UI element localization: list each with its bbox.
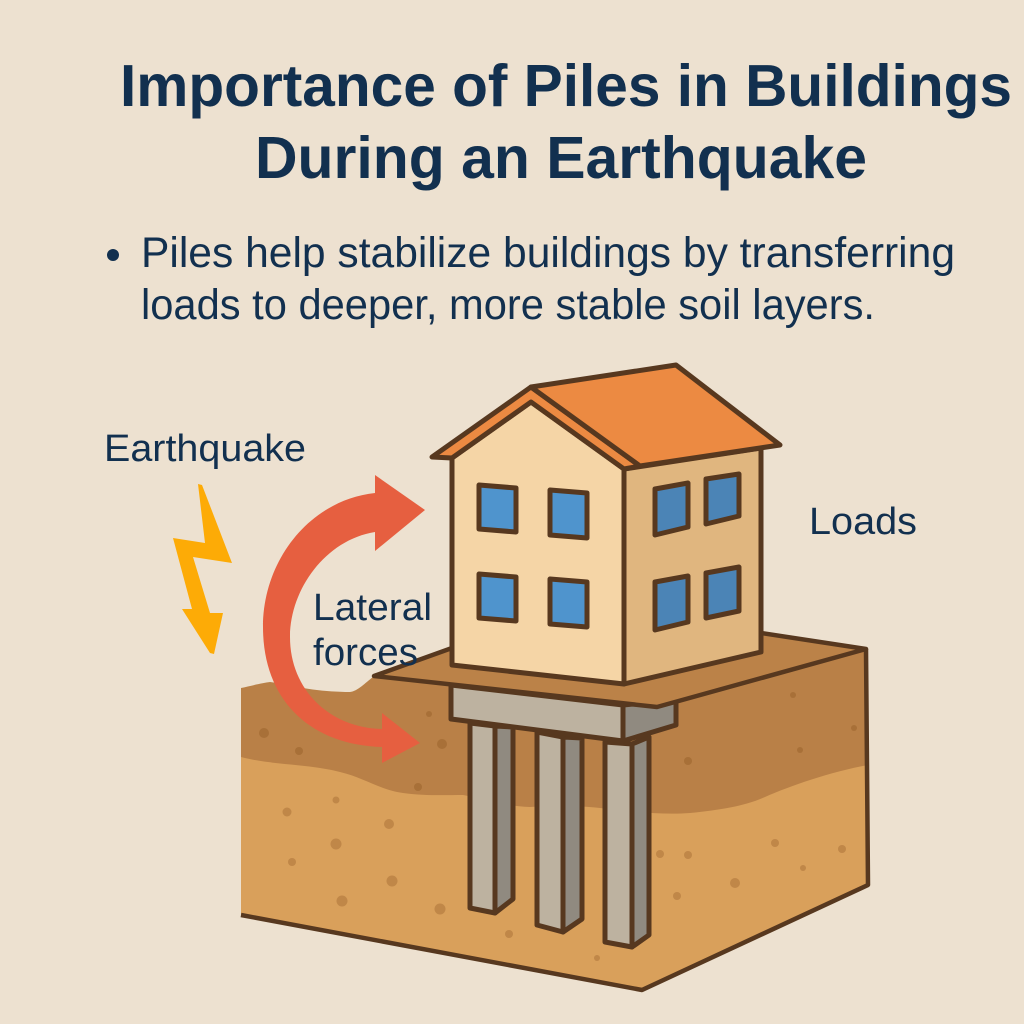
front windows xyxy=(479,485,587,627)
label: lateral forces: forces xyxy=(313,632,418,674)
side windows xyxy=(655,474,739,630)
title xyxy=(120,53,1012,191)
foundation slab xyxy=(374,633,866,707)
label: earthquake: Earthquake xyxy=(104,428,306,470)
bullet text: Piles help stabilize buildings by transferring xyxy=(141,229,955,277)
soil outline xyxy=(241,649,868,990)
roof xyxy=(531,365,780,466)
piles xyxy=(470,723,649,947)
pile 3 xyxy=(605,737,649,947)
label: lateral forces: Lateral xyxy=(313,587,432,629)
pile 1 xyxy=(470,723,513,913)
soil speckles lower xyxy=(282,796,846,961)
soil speckles upper xyxy=(259,692,857,791)
bullet text: loads to deeper, more stable soil layers. xyxy=(141,281,875,329)
house xyxy=(432,365,780,684)
soil block xyxy=(241,648,868,990)
front wall xyxy=(452,402,624,684)
roof gable trim xyxy=(432,387,640,469)
pile 2 xyxy=(537,732,582,932)
pile cap xyxy=(451,685,676,741)
upper soil layer xyxy=(241,648,868,990)
title: Importance of Piles in Buildings xyxy=(120,53,1012,119)
label: lateral forces xyxy=(313,587,432,674)
lower soil layer xyxy=(241,757,868,990)
bullet text xyxy=(107,229,955,329)
icon: lightning bolt xyxy=(173,484,232,654)
arrow: lateral forces xyxy=(263,475,425,763)
right wall xyxy=(624,448,761,684)
label: loads: Loads xyxy=(809,501,917,543)
title: During an Earthquake xyxy=(255,125,867,191)
